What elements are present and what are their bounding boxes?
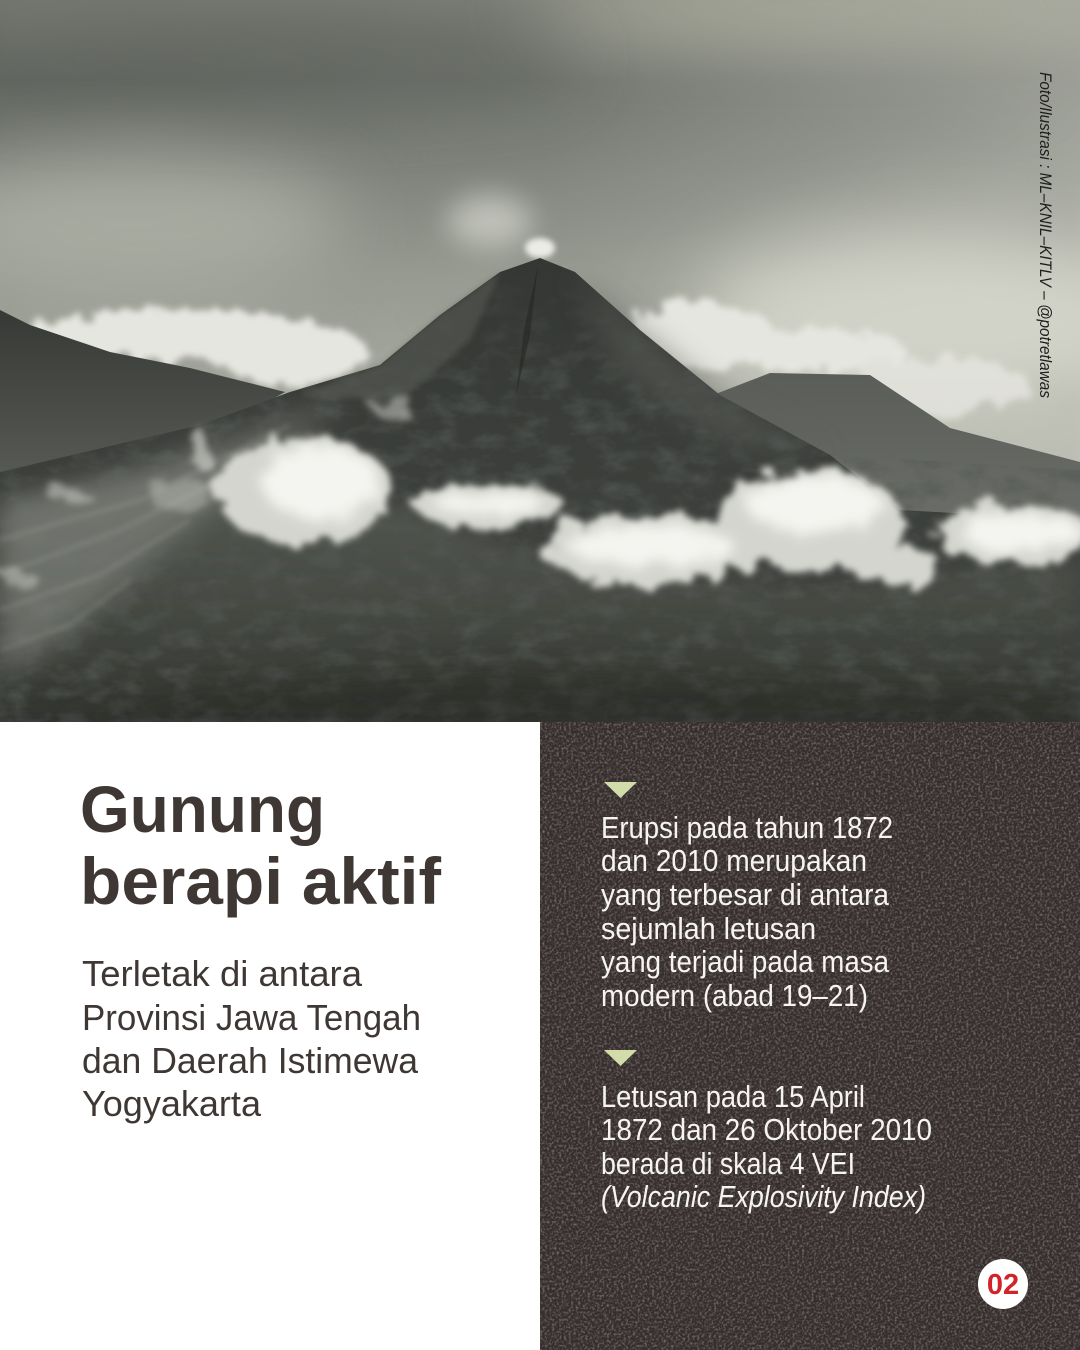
- text block: largest eruptions: yang terjadi pada masa: [601, 944, 890, 979]
- photo: Mount Merapi in black and white: [0, 0, 1080, 740]
- distant clouds behind the ridges: [30, 303, 1030, 413]
- text block: largest eruptions: yang terbesar di antara: [601, 877, 890, 912]
- dark base of the photo: [170, 668, 1069, 722]
- right ridge: [718, 373, 1080, 520]
- text block: largest eruptions: modern (abad 19–21): [601, 978, 868, 1013]
- icon: first green triangle marker: [604, 782, 637, 798]
- foreground terrain: [0, 481, 1078, 722]
- title: [80, 772, 442, 918]
- terrain texture: [2, 334, 1080, 722]
- subtitle: location: dan Daerah Istimewa: [82, 1040, 419, 1081]
- volcanic plume at the summit: [448, 196, 555, 258]
- lava gully on the cone: [516, 269, 538, 392]
- text block: largest eruptions: dan 2010 merupakan: [601, 843, 867, 878]
- subtitle: location: Yogyakarta: [82, 1083, 262, 1124]
- page number badge: 02: [987, 1269, 1019, 1301]
- sky: [0, 0, 1080, 500]
- icon: second green triangle marker: [604, 1050, 637, 1066]
- lit slope on the left of the cone: [300, 272, 500, 400]
- text block: VEI scale: Letusan pada 15 April: [601, 1079, 865, 1114]
- foreground clouds: shadow layer: [2, 396, 1080, 586]
- text block: VEI scale: [601, 1079, 932, 1214]
- title: Gunung: [80, 772, 325, 846]
- title: berapi aktif: [80, 844, 442, 918]
- subtitle: location: Provinsi Jawa Tengah: [82, 997, 421, 1038]
- left ridge: [0, 310, 285, 472]
- subtitle: location: Terletak di antara: [82, 953, 363, 994]
- text block: VEI scale: (Volcanic Explosivity Index): [601, 1179, 926, 1214]
- text block: largest eruptions: sejumlah letusan: [601, 911, 816, 946]
- volcano cone and foreground base: [0, 258, 1080, 722]
- panel: dark textured background: [540, 722, 1080, 1350]
- foreground clouds: bright core: [262, 444, 1080, 565]
- text block: largest eruptions: Erupsi pada tahun 1872: [601, 810, 893, 845]
- text block: VEI scale: berada di skala 4 VEI: [601, 1146, 855, 1181]
- page number badge: [978, 1259, 1028, 1309]
- text block: largest eruptions: [601, 810, 893, 1013]
- subtitle: location: [82, 953, 421, 1124]
- photo credit: Foto/Ilustrasi : ML–KNIL–KITLV – @potretlawas: [1036, 72, 1055, 398]
- lit slope on the right of the cone: [592, 286, 781, 446]
- light debris flow on the left slope: [0, 395, 350, 680]
- text block: VEI scale: 1872 dan 26 Oktober 2010: [601, 1112, 932, 1147]
